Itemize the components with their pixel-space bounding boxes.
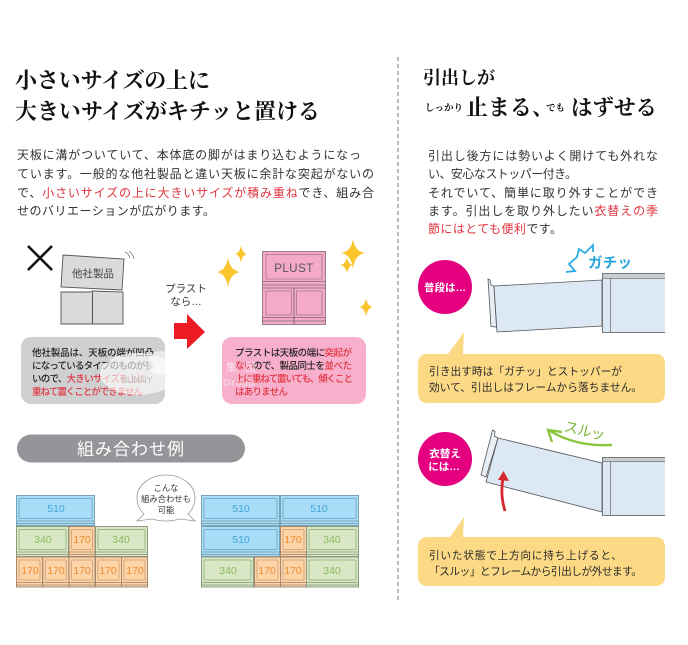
heading: drawer stops and detaches: 引出しが (423, 68, 495, 88)
text block: right description (428, 148, 658, 236)
text block: right description: ます。引出しを取り外したい衣替えの季 (428, 204, 658, 218)
icon: sparkles (217, 238, 373, 317)
chart: right stack of modules: 170 (258, 565, 276, 577)
label: click: ガチッ (588, 255, 632, 272)
heading: small under large (15, 68, 320, 124)
text block: right description: それでいて、簡単に取り外すことができ (428, 185, 658, 200)
badge: normally (418, 260, 472, 314)
callout: normal behaviour (418, 332, 665, 403)
watermark: Sunny Group (188, 377, 254, 389)
callout: Plust note: ないので、製品同士を並べた (235, 360, 352, 372)
callout: speech bubble: 組み合わせも (141, 494, 191, 504)
callout: detach behaviour: 引いた状態で上方向に持ち上げると、 (429, 549, 622, 562)
heading: drawer stops and detaches (423, 68, 657, 120)
section heading: combination examples: 組み合わせ例 (77, 440, 185, 459)
watermark (100, 351, 264, 395)
label: with Plust (165, 283, 207, 308)
chart: right stack of modules: 510 (310, 503, 328, 515)
text block: left description (17, 147, 374, 218)
chart: left stack of modules (16, 496, 148, 587)
illustration: drawer stopped (488, 273, 665, 333)
callout: normal behaviour: 引き出す時は「ガチッ」とストッパーが (429, 365, 622, 378)
callout: speech bubble: こんな (154, 483, 178, 493)
text block: left description: ています。一般的な他社製品と違い天板に余計な突起がないの (17, 166, 374, 181)
heading: drawer stops and detaches: 止まる、 (466, 95, 554, 120)
arrow: red right (174, 314, 205, 349)
chart: right stack of modules: 340 (323, 534, 341, 546)
callout: other company note: 他社製品は、天板の端が凹凸 (32, 347, 154, 359)
callout: Plust note (222, 337, 366, 404)
section heading: combination examples (17, 434, 245, 462)
chart: right stack of modules: 340 (323, 565, 341, 577)
badge: normally: 普段は… (424, 281, 466, 294)
label: with Plust: なら… (170, 296, 202, 308)
badge: when changing clothes (418, 432, 472, 486)
chart: left stack of modules: 340 (34, 534, 52, 546)
callout: Plust note: 上に重ねて置いても、傾くこと (235, 373, 353, 385)
illustration: Plust stack: PLUST (274, 263, 314, 275)
callout: other company note: 重ねて置くことができません (32, 386, 143, 398)
chart: right stack of modules: 510 (232, 534, 250, 546)
chart: left stack of modules: 170 (47, 565, 65, 577)
callout: other company note (21, 337, 165, 404)
heading: drawer stops and detaches: はずせる (571, 96, 657, 120)
text block: right description: い、安心なストッパー付き。 (428, 167, 577, 181)
chart: left stack of modules: 170 (99, 565, 117, 577)
chart: left stack of modules: 170 (21, 565, 39, 577)
label: slide: スルッ (562, 419, 607, 444)
heading: small under large: 大きいサイズがキチッと置ける (15, 99, 320, 124)
callout: Plust note: はありません (235, 387, 288, 398)
badge: when changing clothes: には… (428, 461, 460, 473)
watermark: 美新集团 (188, 360, 264, 374)
illustration: drawer lifted (481, 430, 665, 516)
watermark: SUNNY (121, 375, 153, 385)
chart: left stack of modules: 170 (73, 565, 91, 577)
chart: left stack of modules: 510 (47, 503, 65, 515)
heading: drawer stops and detaches: でも (546, 103, 565, 114)
text block: left description: で、小さいサイズの上に大きいサイズが積み重ねでき、組み合 (17, 185, 374, 200)
callout: detach behaviour: 「スルッ」とフレームから引出しが外せます。 (429, 565, 642, 578)
heading: drawer stops and detaches: しっかり (425, 103, 463, 114)
icon: click burst (566, 245, 593, 272)
arrow: green slide (548, 430, 612, 445)
text block: left description: せのバリエーションが広がります。 (17, 203, 215, 218)
text block: right description: 引出し後方には勢いよく開けても外れな (428, 148, 658, 163)
callout: normal behaviour: 効いて、引出しはフレームから落ちません。 (429, 381, 642, 394)
arrow: red lift (498, 471, 509, 511)
illustration: other company stack (61, 251, 134, 324)
callout: other company note: になっているタイプのものが多 (32, 360, 154, 372)
chart: right stack of modules: 340 (219, 565, 237, 577)
callout: other company note: いので、大きいサイズを上に (32, 373, 146, 385)
badge: when changing clothes: 衣替え (429, 447, 461, 460)
illustration: other company stack: 他社製品 (72, 267, 114, 280)
text block: left description: 天板に溝がついていて、本体底の脚がはまり込むようになっ (17, 147, 361, 162)
icon: cross mark (28, 246, 52, 270)
illustration: Plust stack (262, 252, 326, 325)
chart: right stack of modules: 170 (284, 534, 302, 546)
callout: Plust note: プラストは天板の端に突起が (235, 347, 352, 359)
chart: left stack of modules: 340 (112, 534, 130, 546)
chart: left stack of modules: 170 (126, 565, 144, 577)
heading: small under large: 小さいサイズの上に (15, 68, 210, 93)
chart: left stack of modules: 170 (73, 534, 91, 546)
label: with Plust: プラスト (165, 283, 207, 295)
chart: right stack of modules: 170 (284, 565, 302, 577)
text block: right description: 節にはとても便利です。 (428, 222, 562, 236)
callout: speech bubble (137, 475, 195, 521)
chart: right stack of modules (202, 496, 358, 587)
callout: speech bubble: 可能 (158, 505, 175, 515)
callout: detach behaviour (418, 517, 665, 586)
chart: right stack of modules: 510 (232, 503, 250, 515)
